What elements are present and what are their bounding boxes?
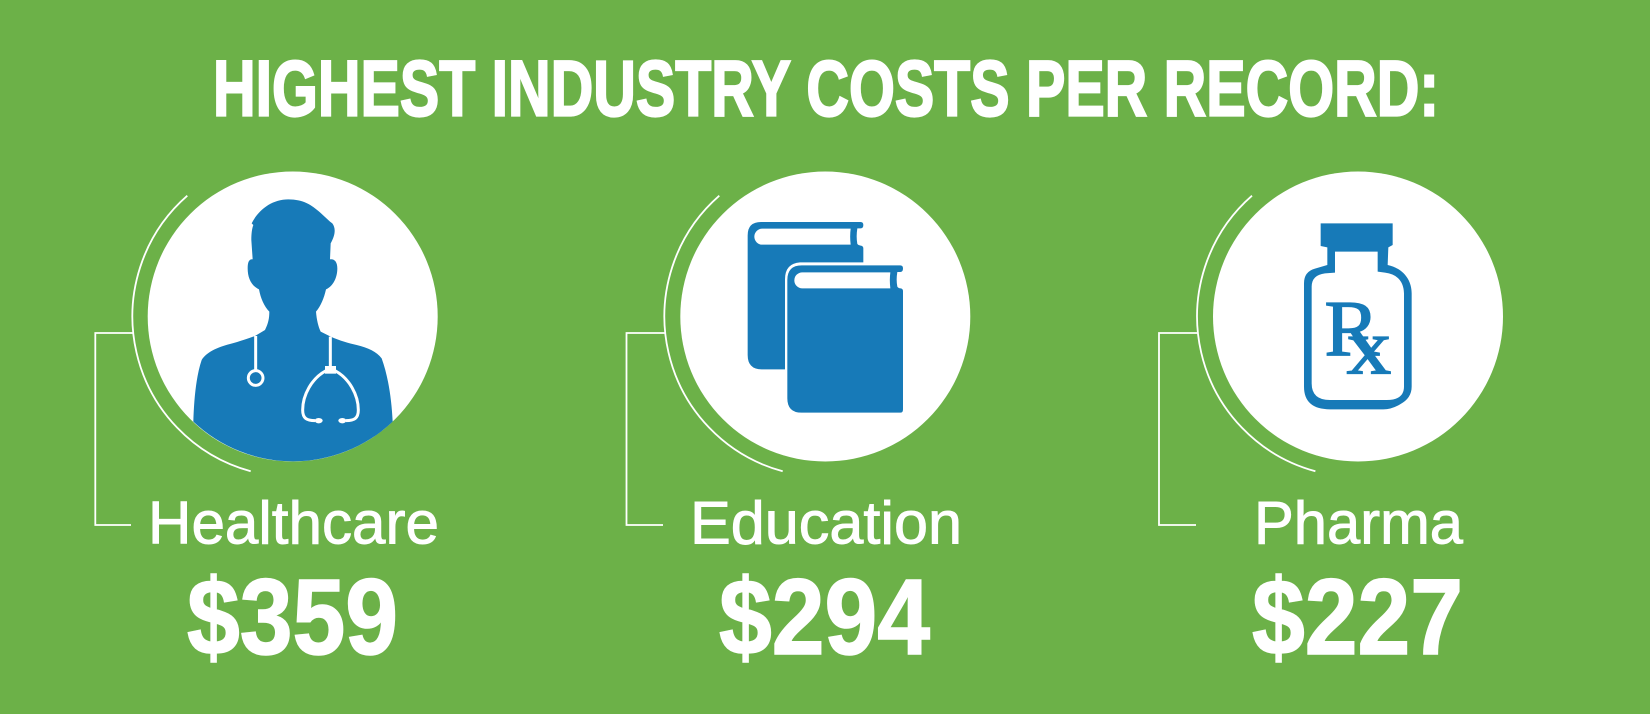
icon: prescription bottle xyxy=(1304,223,1412,409)
Rx symbol xyxy=(1324,286,1391,391)
panel: healthcare xyxy=(95,172,439,677)
white circle xyxy=(148,172,438,462)
icon: doctor with stethoscope xyxy=(193,199,393,461)
value: $227: $227 xyxy=(1252,556,1463,677)
label: Pharma: Pharma xyxy=(1254,490,1464,557)
label: Education: Education xyxy=(690,490,962,557)
icon: two books xyxy=(748,222,903,413)
label: Healthcare: Healthcare xyxy=(148,490,439,557)
panel: pharma xyxy=(1159,172,1503,677)
Rx symbol: R xyxy=(1324,286,1379,374)
Rx symbol: x xyxy=(1347,303,1391,391)
connector arc and line xyxy=(1159,196,1315,525)
connector arc and line xyxy=(626,196,783,525)
value: $294: $294 xyxy=(719,556,930,677)
value: $359: $359 xyxy=(187,556,398,677)
white circle xyxy=(1213,172,1503,462)
panel: education xyxy=(626,172,970,677)
white circle xyxy=(680,172,970,462)
connector arc and line xyxy=(95,196,251,525)
